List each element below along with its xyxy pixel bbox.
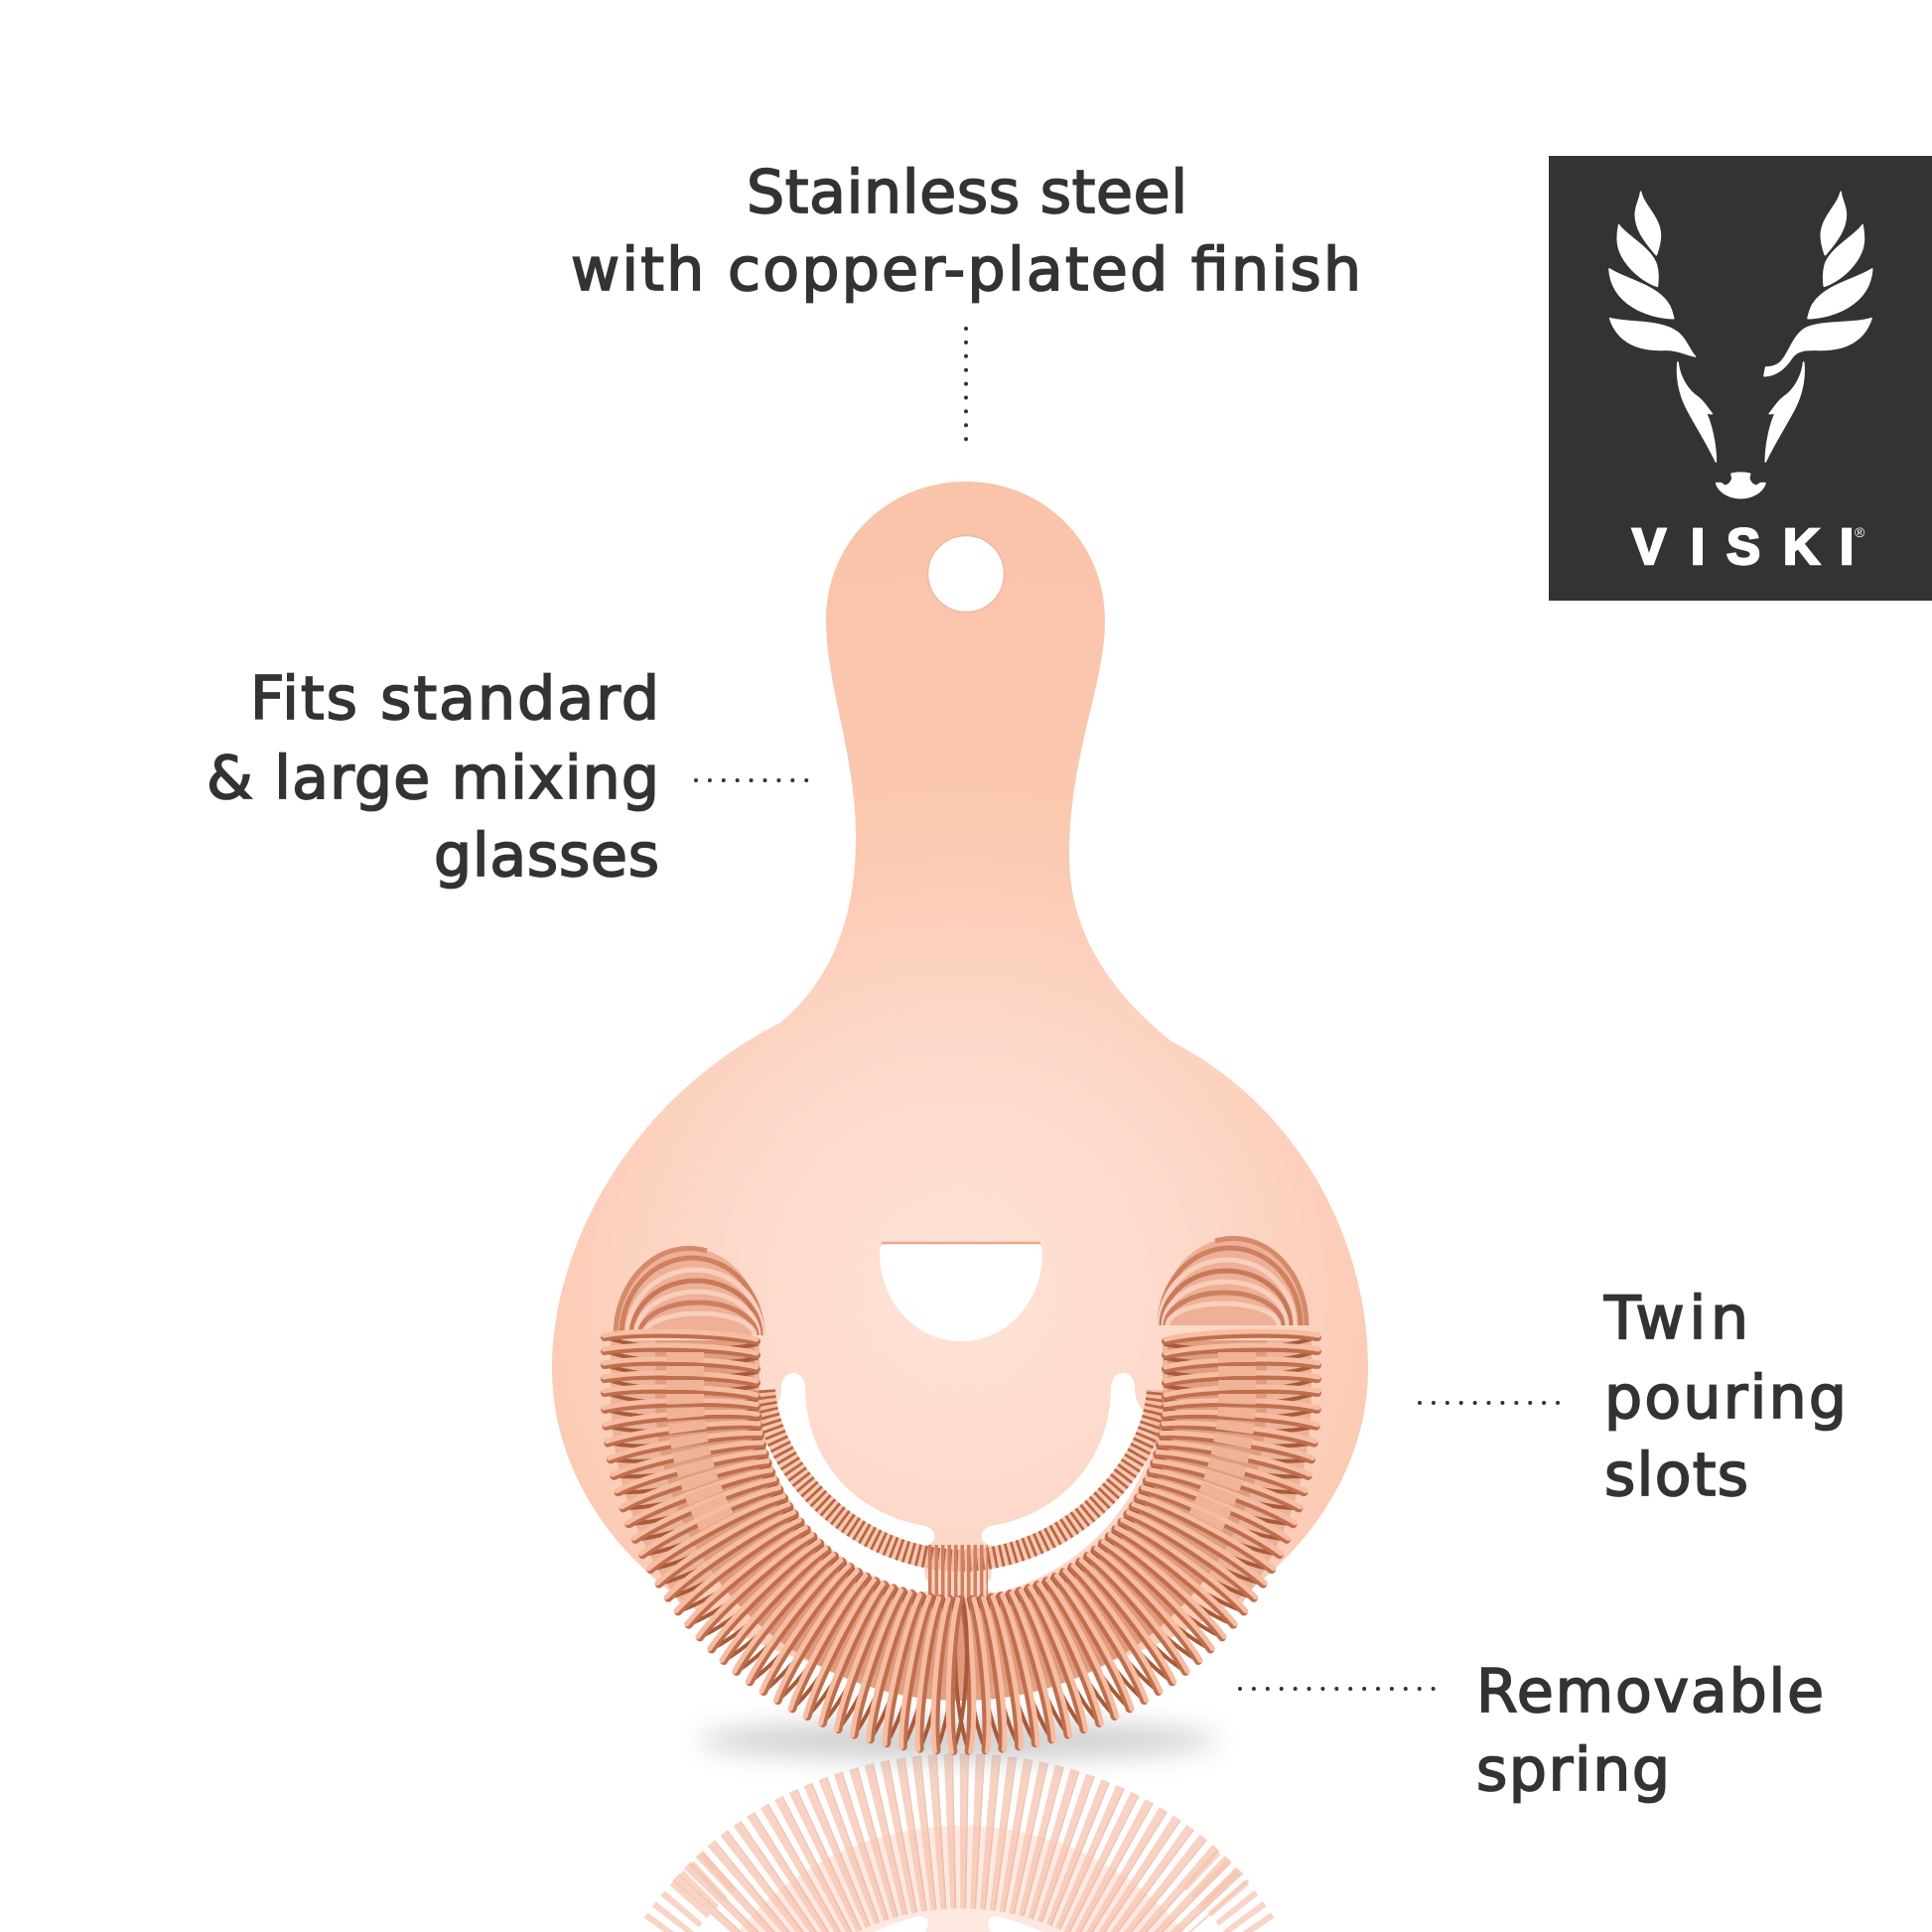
left spring strap (685, 1352, 717, 1522)
dotted leader: stainless steel (964, 329, 968, 440)
right spring strap (1205, 1352, 1237, 1522)
reflected right coil ends (1199, 1868, 1254, 1932)
callout: twin pouring slots: Twin (1603, 1284, 1748, 1353)
callout: fits mixing glasses: glasses (434, 821, 659, 891)
logo wordmark: VISKI (1632, 518, 1854, 575)
left pouring slot (762, 1373, 934, 1592)
reflected left slot (874, 1916, 928, 1932)
half-moon rim (882, 1242, 1040, 1244)
reflected coil shadows (731, 1831, 1191, 1932)
callout: removable spring: Removable (1476, 1657, 1824, 1726)
left spring end (616, 1248, 762, 1335)
dotted leader: removable spring (1240, 1687, 1434, 1691)
callout: twin pouring slots: slots (1604, 1441, 1748, 1510)
right spring end (1160, 1238, 1307, 1325)
callout: twin pouring slots (1603, 1284, 1847, 1510)
callout: stainless steel: Stainless steel (747, 158, 1187, 227)
callout: fits mixing glasses: & large mixing (207, 744, 659, 813)
reflected spring coils (731, 1831, 1191, 1932)
dotted leader: pouring slots (1420, 1401, 1559, 1405)
icon: antlered stag head (1609, 192, 1872, 498)
callout: removable spring: spring (1476, 1735, 1670, 1805)
half-moon opening (880, 1243, 1042, 1341)
callout: stainless steel (571, 158, 1361, 305)
callout: removable spring (1476, 1657, 1824, 1805)
strainer reflection (664, 1826, 1254, 1932)
dotted leader: mixing glasses (696, 778, 808, 782)
callout: fits mixing glasses: Fits standard (250, 664, 659, 734)
spring interior shading (685, 1340, 1237, 1651)
brand logo panel (1549, 156, 1932, 601)
inner thin coil (764, 1390, 1158, 1574)
callout: fits mixing glasses (207, 664, 659, 891)
reflected right slot (988, 1916, 1042, 1932)
main coiled spring, left half (604, 1331, 968, 1752)
right pouring slot (982, 1373, 1154, 1592)
registered mark: ® (1855, 524, 1865, 540)
hanging hole (927, 536, 1005, 612)
callout: stainless steel: with copper-plated finish (571, 235, 1361, 305)
reflected plate (738, 1826, 1184, 1932)
reflected left coil ends (664, 1868, 723, 1932)
copper strainer product (552, 482, 1368, 1752)
main coiled spring, right half (954, 1331, 1318, 1752)
shadow under strainer (698, 1721, 1218, 1760)
strainer plate with handle (552, 482, 1368, 1683)
callout: twin pouring slots: pouring (1604, 1363, 1847, 1433)
